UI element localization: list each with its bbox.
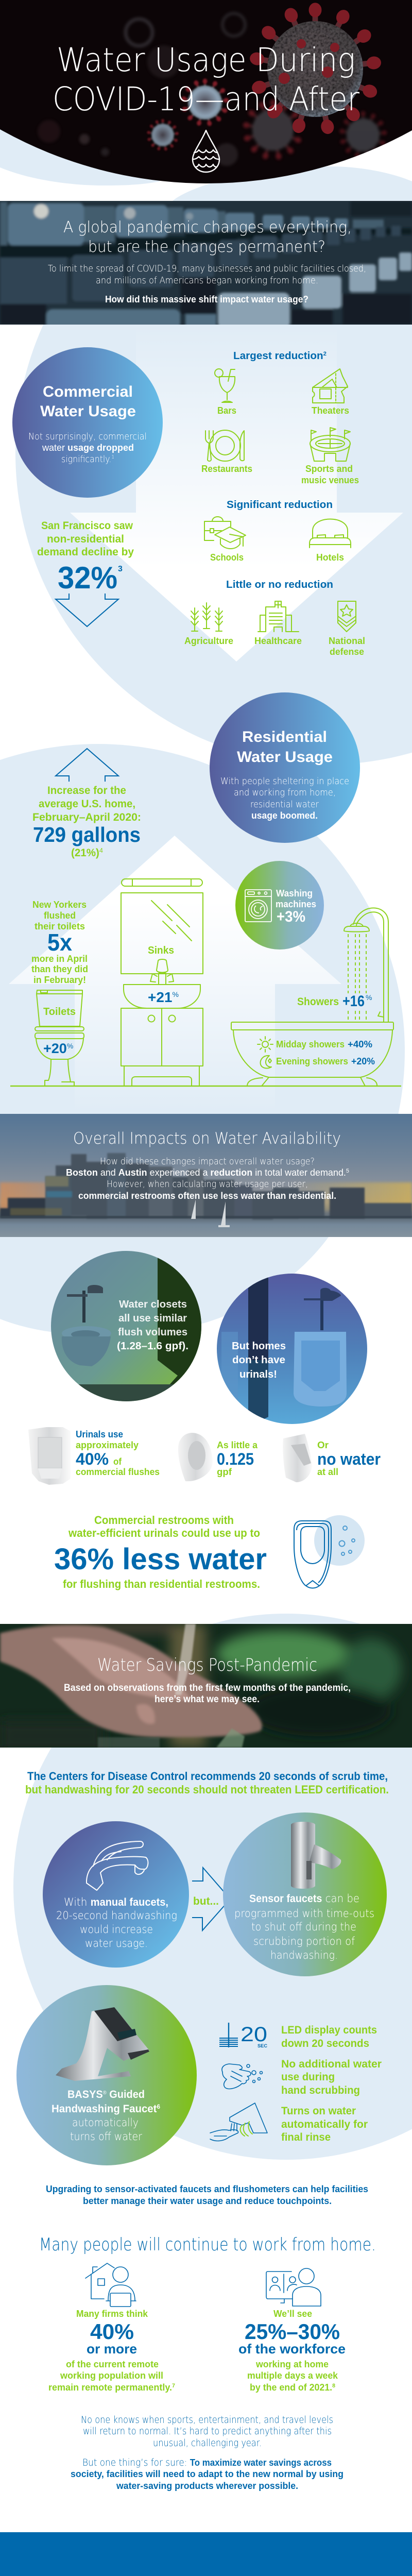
image: small urinal bbox=[178, 1433, 213, 1481]
image: waterless urinal bbox=[283, 1434, 312, 1482]
panel: BASYS faucet: BASYS bbox=[67, 2089, 105, 2100]
panel: sensor faucets bbox=[223, 1812, 387, 1976]
text block: pandemic intro bbox=[48, 263, 366, 304]
icon: sun bbox=[258, 1037, 273, 1052]
panel: Boston skyline photo bbox=[0, 1114, 412, 1237]
text block: observations bbox=[64, 1683, 351, 1705]
panel: manual faucets bbox=[43, 1821, 189, 1968]
column: firms think: Many firms think bbox=[76, 2308, 148, 2319]
text block: upgrading bbox=[46, 2183, 368, 2206]
panel: urinals circle bbox=[217, 1273, 367, 1427]
urinal stat 1: of bbox=[113, 1456, 122, 1467]
image: chrome sensor faucet bbox=[291, 1822, 341, 1889]
image: BASYS chrome faucet bbox=[56, 2007, 149, 2081]
text block: CDC recommendation: The Centers for Disease Control recommends 20 seconds of scrub time, bbox=[27, 1770, 388, 1783]
callout: average home increase: (21%) bbox=[71, 847, 100, 859]
panel: urinals circle: urinals! bbox=[239, 1369, 277, 1380]
icon: shower and bathtub: +40% bbox=[348, 1039, 372, 1049]
urinal stat 2 bbox=[178, 1433, 258, 1481]
feature: LED display: down 20 seconds bbox=[281, 2038, 369, 2049]
callout: average home increase: 729 gallons bbox=[33, 823, 141, 846]
panel: sensor faucets: Sensor faucets can be bbox=[249, 1892, 359, 1905]
column: firms think: remain remote permanently. bbox=[48, 2382, 175, 2393]
heading: pandemic question: but are the changes permanent? bbox=[88, 238, 325, 256]
icon: sink and vanity bbox=[121, 879, 203, 1086]
urinal stat 1 bbox=[28, 1427, 160, 1485]
panel: manual faucets: would increase bbox=[80, 1923, 153, 1936]
panel: washing machines: Washing bbox=[276, 888, 313, 899]
urinal stat 2: As little a bbox=[217, 1440, 258, 1450]
column: workforce at home: We’ll see bbox=[273, 2308, 312, 2319]
icon: home worker bbox=[85, 2263, 136, 2307]
text block: conclusion: water-saving products wherever possible. bbox=[116, 2480, 298, 2491]
column: firms think: 7 bbox=[172, 2383, 175, 2389]
label: sports venues: music venues bbox=[301, 475, 359, 485]
icon: agriculture bbox=[191, 603, 222, 631]
panel: BASYS faucet: Handwashing Faucet bbox=[52, 2103, 160, 2115]
column: firms think: 40% bbox=[90, 2319, 134, 2344]
icon: urinal with bubbles bbox=[294, 1515, 365, 1588]
icon: sink and vanity: +21 bbox=[148, 989, 172, 1005]
text block: conclusion: will return to normal. It’s hard to predict anything after this bbox=[83, 2426, 332, 2437]
panel: manual faucets: 20-second handwashing bbox=[56, 1909, 177, 1922]
label: theaters: Theaters bbox=[312, 405, 349, 416]
text block: pandemic intro: To limit the spread of COVID-19, many businesses and public facilities closed, bbox=[48, 263, 366, 274]
panel: water closets circle: flush volumes bbox=[118, 1327, 187, 1338]
text block: conclusion: But one thing’s for sure: To maximize water savings across bbox=[82, 2457, 332, 2468]
icon: LED countdown: SEC bbox=[258, 2043, 268, 2048]
icon: hotels bbox=[310, 519, 351, 548]
text block: conclusion: No one knows when sports, entertainment, and travel levels bbox=[81, 2415, 333, 2426]
title: COVID-19—and After bbox=[53, 80, 359, 118]
panel: residential water usage: residential water bbox=[250, 799, 319, 810]
callout: 36% less water: Commercial restrooms with bbox=[94, 1514, 234, 1527]
callout: New Yorkers flushed: 5x bbox=[47, 929, 72, 956]
column: workforce at home: multiple days a week bbox=[247, 2370, 338, 2381]
feature: final rinse: automatically for bbox=[281, 2119, 368, 2130]
callout: average home increase: 4 bbox=[99, 846, 103, 854]
main virus bbox=[249, 3, 382, 135]
icon: sink and vanity: Sinks bbox=[148, 945, 174, 956]
title bbox=[53, 41, 359, 118]
text block: conclusion: society, facilities will need to adapt to the new normal by using bbox=[71, 2468, 344, 2479]
label: restaurants: Restaurants bbox=[201, 464, 252, 474]
label: agriculture: Agriculture bbox=[184, 636, 233, 646]
callout: average home increase: average U.S. home, bbox=[39, 798, 135, 810]
text block: CDC recommendation: but handwashing for 20 seconds should not threaten LEED certification. bbox=[25, 1783, 389, 1796]
panel: residential water usage: With people sheltering in place bbox=[220, 776, 349, 787]
text block: water availability intro bbox=[66, 1156, 349, 1201]
panel: BASYS faucet: automatically bbox=[72, 2116, 139, 2129]
icon: water drop bbox=[193, 130, 219, 172]
urinal stat 1: approximately bbox=[76, 1440, 139, 1450]
callout: average home increase: February–April 2020: bbox=[32, 811, 141, 823]
feature: no additional water: hand scrubbing bbox=[281, 2084, 360, 2096]
column: workforce at home: by the end of 2021. bbox=[250, 2382, 336, 2393]
panel: water closets circle: all use similar bbox=[118, 1313, 187, 1324]
text block: water availability intro: Boston and Austin experienced a reduction in total water demand. bbox=[66, 1167, 346, 1178]
panel: BASYS faucet: ® bbox=[103, 2090, 107, 2096]
arrow: but: but... bbox=[193, 1895, 219, 1907]
icon: shower and bathtub: Showers bbox=[297, 996, 339, 1008]
icon: sensor faucet with hand bbox=[210, 2103, 267, 2141]
callout: New Yorkers flushed: flushed bbox=[44, 910, 76, 921]
feature: no additional water: use during bbox=[281, 2071, 335, 2083]
heading: largest reduction: 2 bbox=[323, 351, 327, 357]
urinal stat 3: at all bbox=[317, 1467, 338, 1477]
urinal stat 1: Urinals use bbox=[76, 1429, 123, 1439]
icon: bars bbox=[215, 369, 235, 402]
text block: observations: Based on observations from the first few months of the pandemic, bbox=[64, 1683, 351, 1693]
feature: no additional water bbox=[222, 2058, 382, 2096]
panel: stadium photo bbox=[0, 201, 412, 330]
callout: average home increase bbox=[32, 749, 141, 859]
icon: LED countdown: 20 bbox=[241, 2023, 267, 2046]
label: national defense: defense bbox=[330, 647, 364, 657]
background virus particles bbox=[38, 13, 387, 166]
panel: commercial water usage: water usage dropped bbox=[42, 443, 134, 453]
icon: shower and bathtub: +20% bbox=[351, 1056, 375, 1066]
icon: video meeting bbox=[266, 2268, 321, 2306]
icon: sports venues bbox=[310, 428, 350, 461]
text block: water availability intro: However, when calculating water usage per user, bbox=[107, 1179, 308, 1190]
icon: toilet: Toilets bbox=[43, 1006, 76, 1018]
column: workforce at home: working at home bbox=[255, 2359, 329, 2369]
callout: New Yorkers flushed: New Yorkers bbox=[32, 900, 87, 910]
callout: 36% less water: 36% less water bbox=[54, 1543, 267, 1576]
callout: New Yorkers flushed: their toilets bbox=[35, 921, 85, 931]
column: firms think: or more bbox=[87, 2341, 137, 2357]
label: national defense bbox=[329, 636, 365, 657]
footer panel bbox=[0, 2532, 412, 2576]
image: wall urinal bbox=[28, 1427, 71, 1485]
panel: hand washing photo bbox=[0, 1624, 412, 1752]
floor line bbox=[10, 1086, 401, 1087]
label: sports venues: Sports and bbox=[305, 464, 353, 474]
panel: BASYS faucet bbox=[16, 1985, 197, 2165]
text block: upgrading: better manage their water usage and reduce touchpoints. bbox=[83, 2195, 332, 2206]
panel: water closets circle: Water closets bbox=[119, 1299, 187, 1310]
text block: water availability intro: 5 bbox=[346, 1168, 349, 1174]
urinal stat 2: 0.125 bbox=[217, 1450, 254, 1468]
panel: water closets circle bbox=[51, 1251, 201, 1401]
icon: moon bbox=[261, 1056, 271, 1068]
feature: no additional water: No additional water bbox=[281, 2058, 382, 2070]
icon: national defense bbox=[338, 601, 356, 632]
text block: upgrading: Upgrading to sensor-activated faucets and flushometers can help facilities bbox=[46, 2183, 368, 2194]
label: sports venues bbox=[301, 464, 359, 485]
callout: 36% less water: for flushing than residential restrooms. bbox=[63, 1578, 260, 1590]
icon: shower and bathtub: % bbox=[366, 993, 372, 1002]
background wave shapes bbox=[0, 124, 412, 2160]
feature: final rinse bbox=[210, 2103, 368, 2143]
text block: observations: here’s what we may see. bbox=[154, 1694, 260, 1705]
panel: residential water usage: and working from home, bbox=[234, 787, 336, 798]
title: Water Usage During bbox=[57, 41, 355, 79]
icon: restaurants bbox=[205, 430, 244, 461]
urinal stat 1: 40% bbox=[76, 1450, 109, 1468]
column: firms think: of the current remote bbox=[66, 2359, 159, 2369]
panel: commercial water usage: Commercial bbox=[43, 383, 133, 400]
arrow: down bbox=[56, 594, 118, 626]
column: workforce at home: 8 bbox=[332, 2383, 335, 2389]
callout: average home increase: Increase for the bbox=[47, 785, 126, 796]
callout: New Yorkers flushed: in February! bbox=[33, 975, 86, 985]
hero panel: virus photo bbox=[0, 0, 412, 183]
callout: San Francisco decline: non-residential bbox=[47, 533, 124, 545]
heading: pandemic question: A global pandemic changes everything, bbox=[63, 218, 352, 236]
panel: sensor faucets: scrubbing portion of bbox=[253, 1935, 355, 1947]
panel: washing machines: +3% bbox=[277, 908, 305, 925]
column: workforce at home: of the workforce bbox=[238, 2341, 346, 2357]
feature: LED display bbox=[219, 2023, 377, 2049]
heading: little or no reduction: Little or no reduction bbox=[226, 579, 333, 590]
callout: 36% less water bbox=[54, 1514, 267, 1590]
heading: significant reduction: Significant reduction bbox=[227, 499, 333, 511]
heading: overall impacts: Overall Impacts on Water Availability bbox=[73, 1129, 341, 1148]
urinal stat 3: Or bbox=[317, 1440, 329, 1450]
heading: largest reduction: Largest reduction bbox=[233, 350, 320, 362]
text block: conclusion bbox=[71, 2415, 344, 2491]
column: workforce at home: 25%–30% bbox=[245, 2319, 340, 2344]
label: hotels: Hotels bbox=[316, 552, 344, 563]
callout: New Yorkers flushed bbox=[31, 900, 88, 985]
label: schools: Schools bbox=[210, 552, 244, 563]
panel: water closets circle: (1.28–1.6 gpf). bbox=[117, 1341, 188, 1352]
panel: commercial water usage: Water Usage bbox=[40, 403, 136, 420]
callout: San Francisco decline: 32% bbox=[58, 561, 117, 595]
column: workforce at home bbox=[238, 2268, 346, 2393]
feature: LED display: LED display counts bbox=[281, 2024, 377, 2036]
arrow: commercial decline background bbox=[70, 325, 403, 662]
panel: BASYS faucet: turns off water bbox=[70, 2130, 142, 2143]
icon: sink and vanity: % bbox=[172, 990, 179, 998]
panel: urinals circle: don’t have bbox=[232, 1354, 285, 1366]
panel: washing machines: machines bbox=[276, 899, 316, 909]
icon: toilet: % bbox=[67, 1042, 73, 1050]
arrow: but bbox=[192, 1868, 230, 1930]
callout: San Francisco decline: 3 bbox=[118, 565, 123, 573]
panel: residential water usage: usage boomed. bbox=[251, 810, 318, 821]
icon: schools bbox=[204, 517, 246, 549]
icon: toilet bbox=[35, 990, 84, 1086]
feature: final rinse: final rinse bbox=[281, 2131, 331, 2143]
icon: theaters bbox=[313, 369, 348, 403]
panel: manual faucets: water usage. bbox=[85, 1937, 148, 1950]
panel: sensor faucets: handwashing. bbox=[270, 1949, 338, 1961]
label: bars: Bars bbox=[217, 405, 236, 416]
panel: commercial water usage: significantly. bbox=[61, 454, 118, 465]
panel: washing machines bbox=[235, 861, 324, 950]
urinal stat 2: gpf bbox=[217, 1467, 232, 1477]
icon: scrubbing hands bbox=[222, 2064, 263, 2089]
callout: 36% less water: water-efficient urinals could use up to bbox=[68, 1527, 260, 1539]
text block: pandemic intro: How did this massive shift impact water usage? bbox=[105, 294, 308, 304]
arrow: residential increase background bbox=[9, 836, 341, 1114]
panel: sensor faucets: to shut off during the bbox=[251, 1921, 356, 1933]
text block: conclusion: unusual, challenging year. bbox=[153, 2438, 262, 2449]
panel: residential water usage: Residential bbox=[242, 728, 327, 745]
callout: San Francisco decline: demand decline by bbox=[37, 546, 134, 558]
icon: LED countdown bbox=[219, 2023, 268, 2048]
panel: commercial water usage: 1 bbox=[111, 454, 114, 460]
label: national defense: National bbox=[329, 636, 365, 646]
column: firms think bbox=[48, 2263, 175, 2393]
feature: final rinse: Turns on water bbox=[281, 2105, 356, 2117]
column: firms think: working population will bbox=[60, 2370, 163, 2381]
arrow: up bbox=[56, 749, 118, 782]
callout: New Yorkers flushed: more in April bbox=[31, 954, 88, 964]
text block: water availability intro: How did these changes impact overall water usage? bbox=[100, 1156, 315, 1167]
panel: commercial water usage bbox=[12, 347, 163, 498]
icon: washing machine bbox=[245, 890, 271, 922]
panel: residential water usage: Water Usage bbox=[237, 749, 333, 766]
text block: pandemic intro: and millions of Americans began working from home. bbox=[96, 275, 318, 286]
panel: BASYS faucet: Guided bbox=[107, 2089, 145, 2100]
icon: healthcare bbox=[258, 601, 299, 632]
panel: manual faucets: With manual faucets, bbox=[64, 1896, 168, 1908]
text block: CDC recommendation bbox=[25, 1770, 389, 1796]
panel: urinals circle: But homes bbox=[232, 1341, 286, 1352]
label: healthcare: Healthcare bbox=[254, 636, 302, 646]
callout: San Francisco decline: San Francisco saw bbox=[41, 520, 133, 532]
icon: shower and bathtub bbox=[231, 908, 393, 1086]
callout: New Yorkers flushed: than they did bbox=[31, 964, 88, 974]
text block: water availability intro: commercial restrooms often use less water than residential. bbox=[78, 1191, 336, 1201]
heading: water savings: Water Savings Post-Pandemic bbox=[97, 1655, 317, 1675]
urinal stat 1: commercial flushes bbox=[76, 1467, 160, 1477]
panel: sensor faucets: programmed with time-outs bbox=[234, 1907, 374, 1920]
panel: residential water usage bbox=[210, 692, 360, 843]
icon: toilet: +20 bbox=[43, 1041, 67, 1056]
icon: shower and bathtub: Evening showers bbox=[276, 1056, 348, 1066]
heading: pandemic question bbox=[63, 218, 352, 256]
panel: commercial water usage: Not surprisingly, commercial bbox=[28, 431, 147, 442]
urinal stat 3 bbox=[283, 1434, 381, 1482]
urinal stat 3: no water bbox=[317, 1450, 381, 1468]
panel: BASYS faucet: 6 bbox=[157, 2103, 160, 2110]
icon: shower and bathtub: Midday showers bbox=[276, 1039, 345, 1049]
icon: manual faucet bbox=[87, 1841, 148, 1890]
callout: San Francisco decline bbox=[37, 520, 134, 626]
icon: shower and bathtub: +16 bbox=[342, 993, 365, 1010]
